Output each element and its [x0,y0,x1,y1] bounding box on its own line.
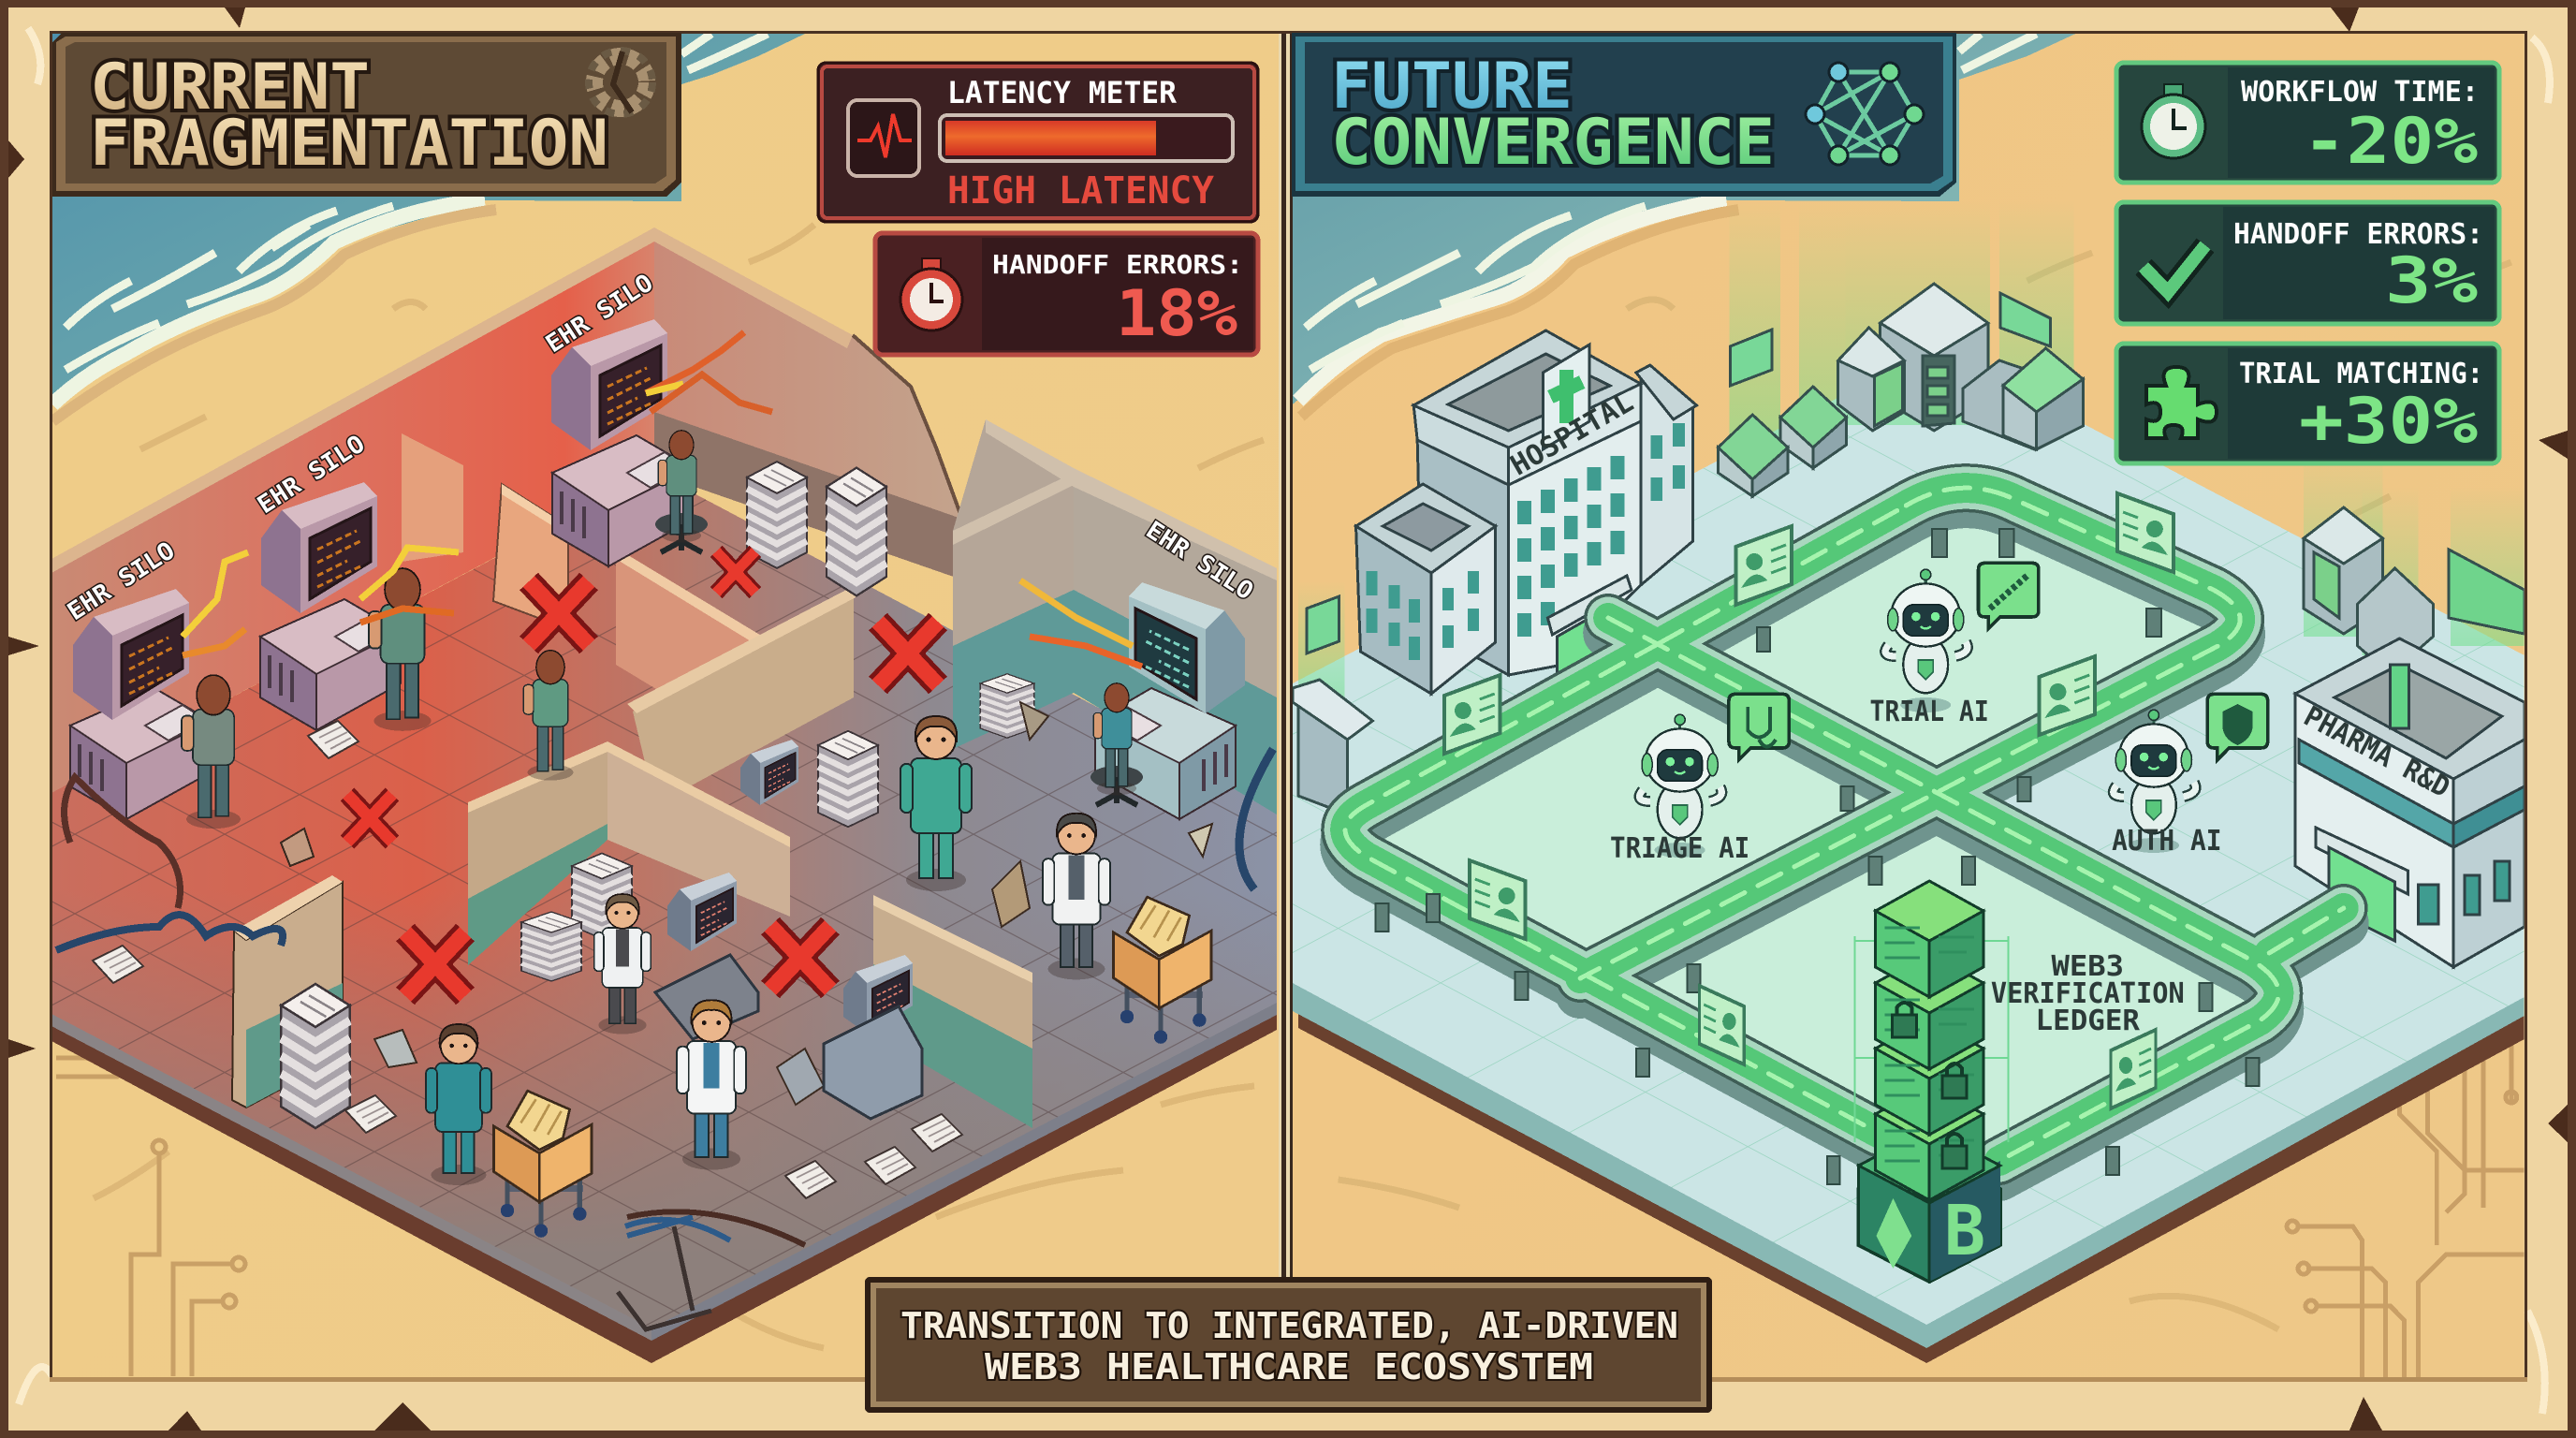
blockchain ledger tower: B [1944,1191,1985,1271]
icon: blockchain network [1806,63,1924,165]
icon: heartbeat monitor [848,100,919,176]
lower cubicle walls [232,741,1032,1128]
panel: handoff errors future: HANDOFF ERRORS: [2233,218,2483,251]
panel: workflow time: WORKFLOW TIME: [2241,76,2479,109]
heading: future convergence: FUTURE [1331,50,1573,124]
icon: broken gear [589,51,652,114]
side annex and satellite servers [1293,507,2525,814]
Auth AI agent: AUTH AI [2112,825,2221,858]
heading: current fragmentation: CURRENT [90,51,370,125]
supply carts [494,897,1211,1238]
heading: current fragmentation: FRAGMENTATION [90,107,608,181]
panel: handoff errors current: HANDOFF ERRORS: [992,249,1243,280]
panel: latency meter [818,63,1258,222]
banner: transition caption: WEB3 HEALTHCARE ECOSYSTEM [985,1346,1593,1387]
EHR silo labels [63,269,1258,626]
panel: latency meter: HIGH LATENCY [947,169,1214,213]
interior cubicle walls [402,433,859,805]
beach background [1293,34,2525,1379]
low terminals [655,740,922,1119]
central divider [1279,32,1293,1279]
banner: transition caption [865,1277,1712,1413]
Trial AI agent: TRIAL AI [1870,696,1989,728]
pharma R&D building [2295,638,2525,967]
EHR workstation 4 [1090,582,1245,819]
icon: stopwatch [900,258,962,330]
pharma R&D building: PHARMA R&D [2298,700,2455,804]
cables and cracks [56,749,1273,1329]
banner: transition caption: TRANSITION TO INTEGRATED, AI-DRIVEN [900,1305,1678,1346]
EHR silo labels: EHR SILO [541,269,658,359]
hospital building: HOSPITAL [1505,386,1639,482]
heading: future convergence [1292,33,1956,197]
panel: future convergence scene [1293,34,2525,1379]
Auth AI agent [2112,694,2268,858]
back walls [51,227,1277,814]
Trial AI agent [1870,563,2039,728]
panel: trial matching [2116,344,2499,463]
panel: handoff errors current [875,233,1258,355]
Web3 ledger label: LEDGER [2036,1005,2140,1037]
EHR silo labels: EHR SILO [63,536,180,626]
Triage AI agent: TRIAGE AI [1610,832,1749,865]
EHR silo labels: EHR SILO [253,430,370,520]
heading: future convergence: CONVERGENCE [1331,106,1775,180]
clinicians [426,651,1110,1185]
stacks in front of walls [281,853,632,1128]
panel: current fragmentation scene [51,34,1279,1379]
Triage AI agent [1610,694,1789,865]
blockchain ledger tower [1855,881,2009,1282]
panel: handoff errors future: 3% [2385,244,2478,318]
panel: handoff errors future [2116,202,2499,324]
mint zones inside the track loops [1385,528,2245,1141]
panel: handoff errors current: 18% [1116,277,1237,351]
circuit traces on sand [56,1056,247,1376]
paper stacks [747,462,1034,827]
hospital building [1356,330,1697,712]
icon: puzzle piece [2146,367,2217,438]
panel: workflow time [2116,63,2499,183]
side block [1356,484,1496,694]
scattered papers and debris [93,702,1212,1198]
EHR workstation 1 [70,589,241,829]
Web3 ledger label [1991,950,2185,1037]
rear tower [1636,365,1697,585]
patient record cards [1444,493,2174,1108]
latency bar [940,115,1233,161]
Web3 ledger label: WEB3 [2051,950,2124,983]
EHR silo labels: EHR SILO [1141,516,1258,606]
EHR workstation 2 [260,482,432,731]
red X failure marks [347,551,938,996]
icon: check mark [2144,245,2205,292]
broken data sparks [183,332,1142,667]
floor platform [51,473,1277,1363]
panel: trial matching: TRIAL MATCHING: [2239,358,2483,390]
beach background [52,34,1279,1379]
panel: latency meter: LATENCY METER [947,75,1178,110]
Web3 ledger label: VERIFICATION [1991,977,2185,1010]
floor platform [1293,346,2525,1363]
data glow columns [1298,200,2525,1142]
track supports [1375,529,2259,1184]
icon: stopwatch [2142,84,2205,158]
connected data track [1345,488,2344,1176]
EHR workstation 3 [551,319,708,566]
server cluster [1718,284,2083,496]
circuit traces on sand [2284,1045,2524,1377]
panel: trial matching: +30% [2299,385,2478,459]
panel: workflow time: -20% [2303,105,2478,179]
heading: current fragmentation [52,33,681,197]
main tower [1413,330,1641,675]
